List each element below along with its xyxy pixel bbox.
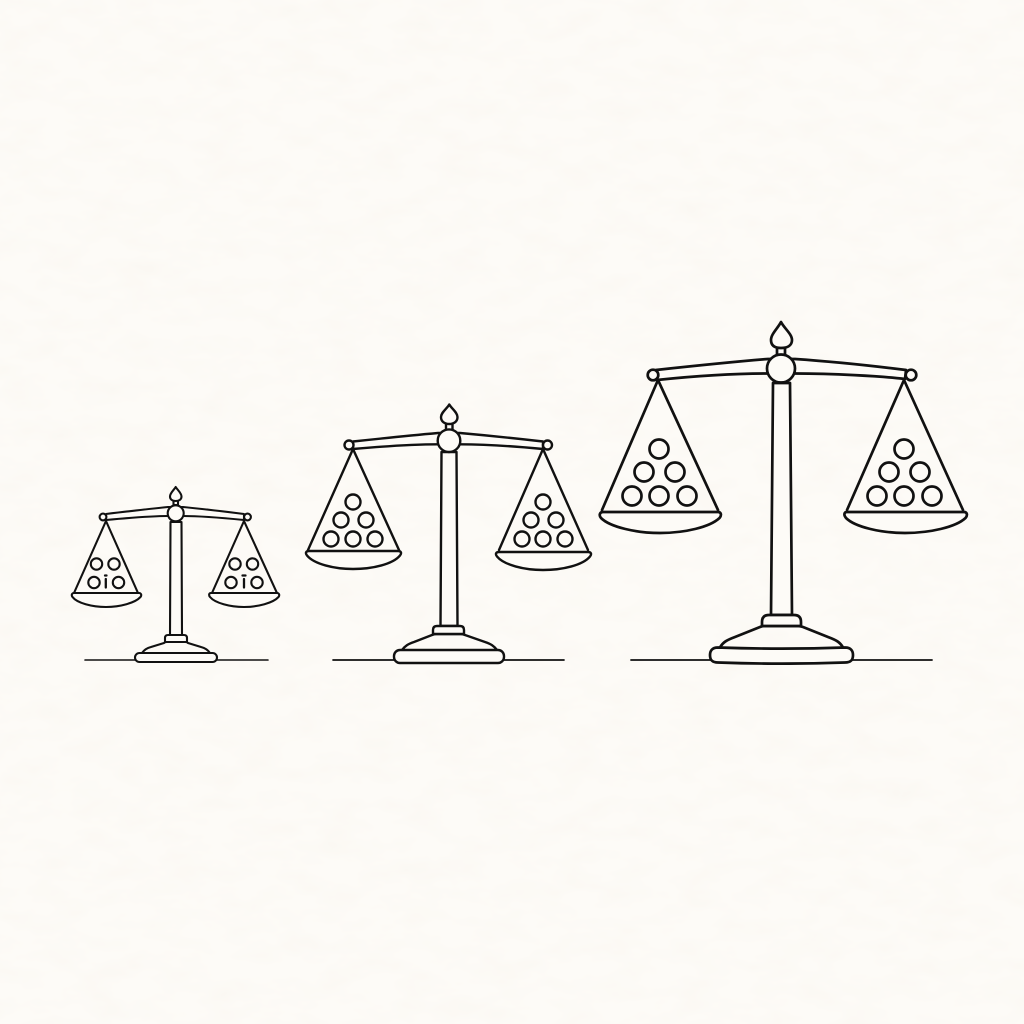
small ground line [85,659,268,661]
large stand [710,383,853,664]
small stand [135,522,217,662]
large left pan with weights [600,380,721,533]
large ground line [631,659,932,661]
large beam [648,322,916,382]
medium ground line [333,659,564,661]
large right pan with weights [844,380,967,533]
small left pan with weights [72,521,141,607]
medium right pan with weights [496,449,591,570]
medium stand [394,452,504,663]
small scale [72,487,279,662]
small beam [100,487,251,521]
medium left pan with weights [306,449,401,569]
large scale [600,322,967,664]
medium scale [306,404,591,663]
small right pan with weights [209,521,279,607]
medium beam [344,404,552,452]
